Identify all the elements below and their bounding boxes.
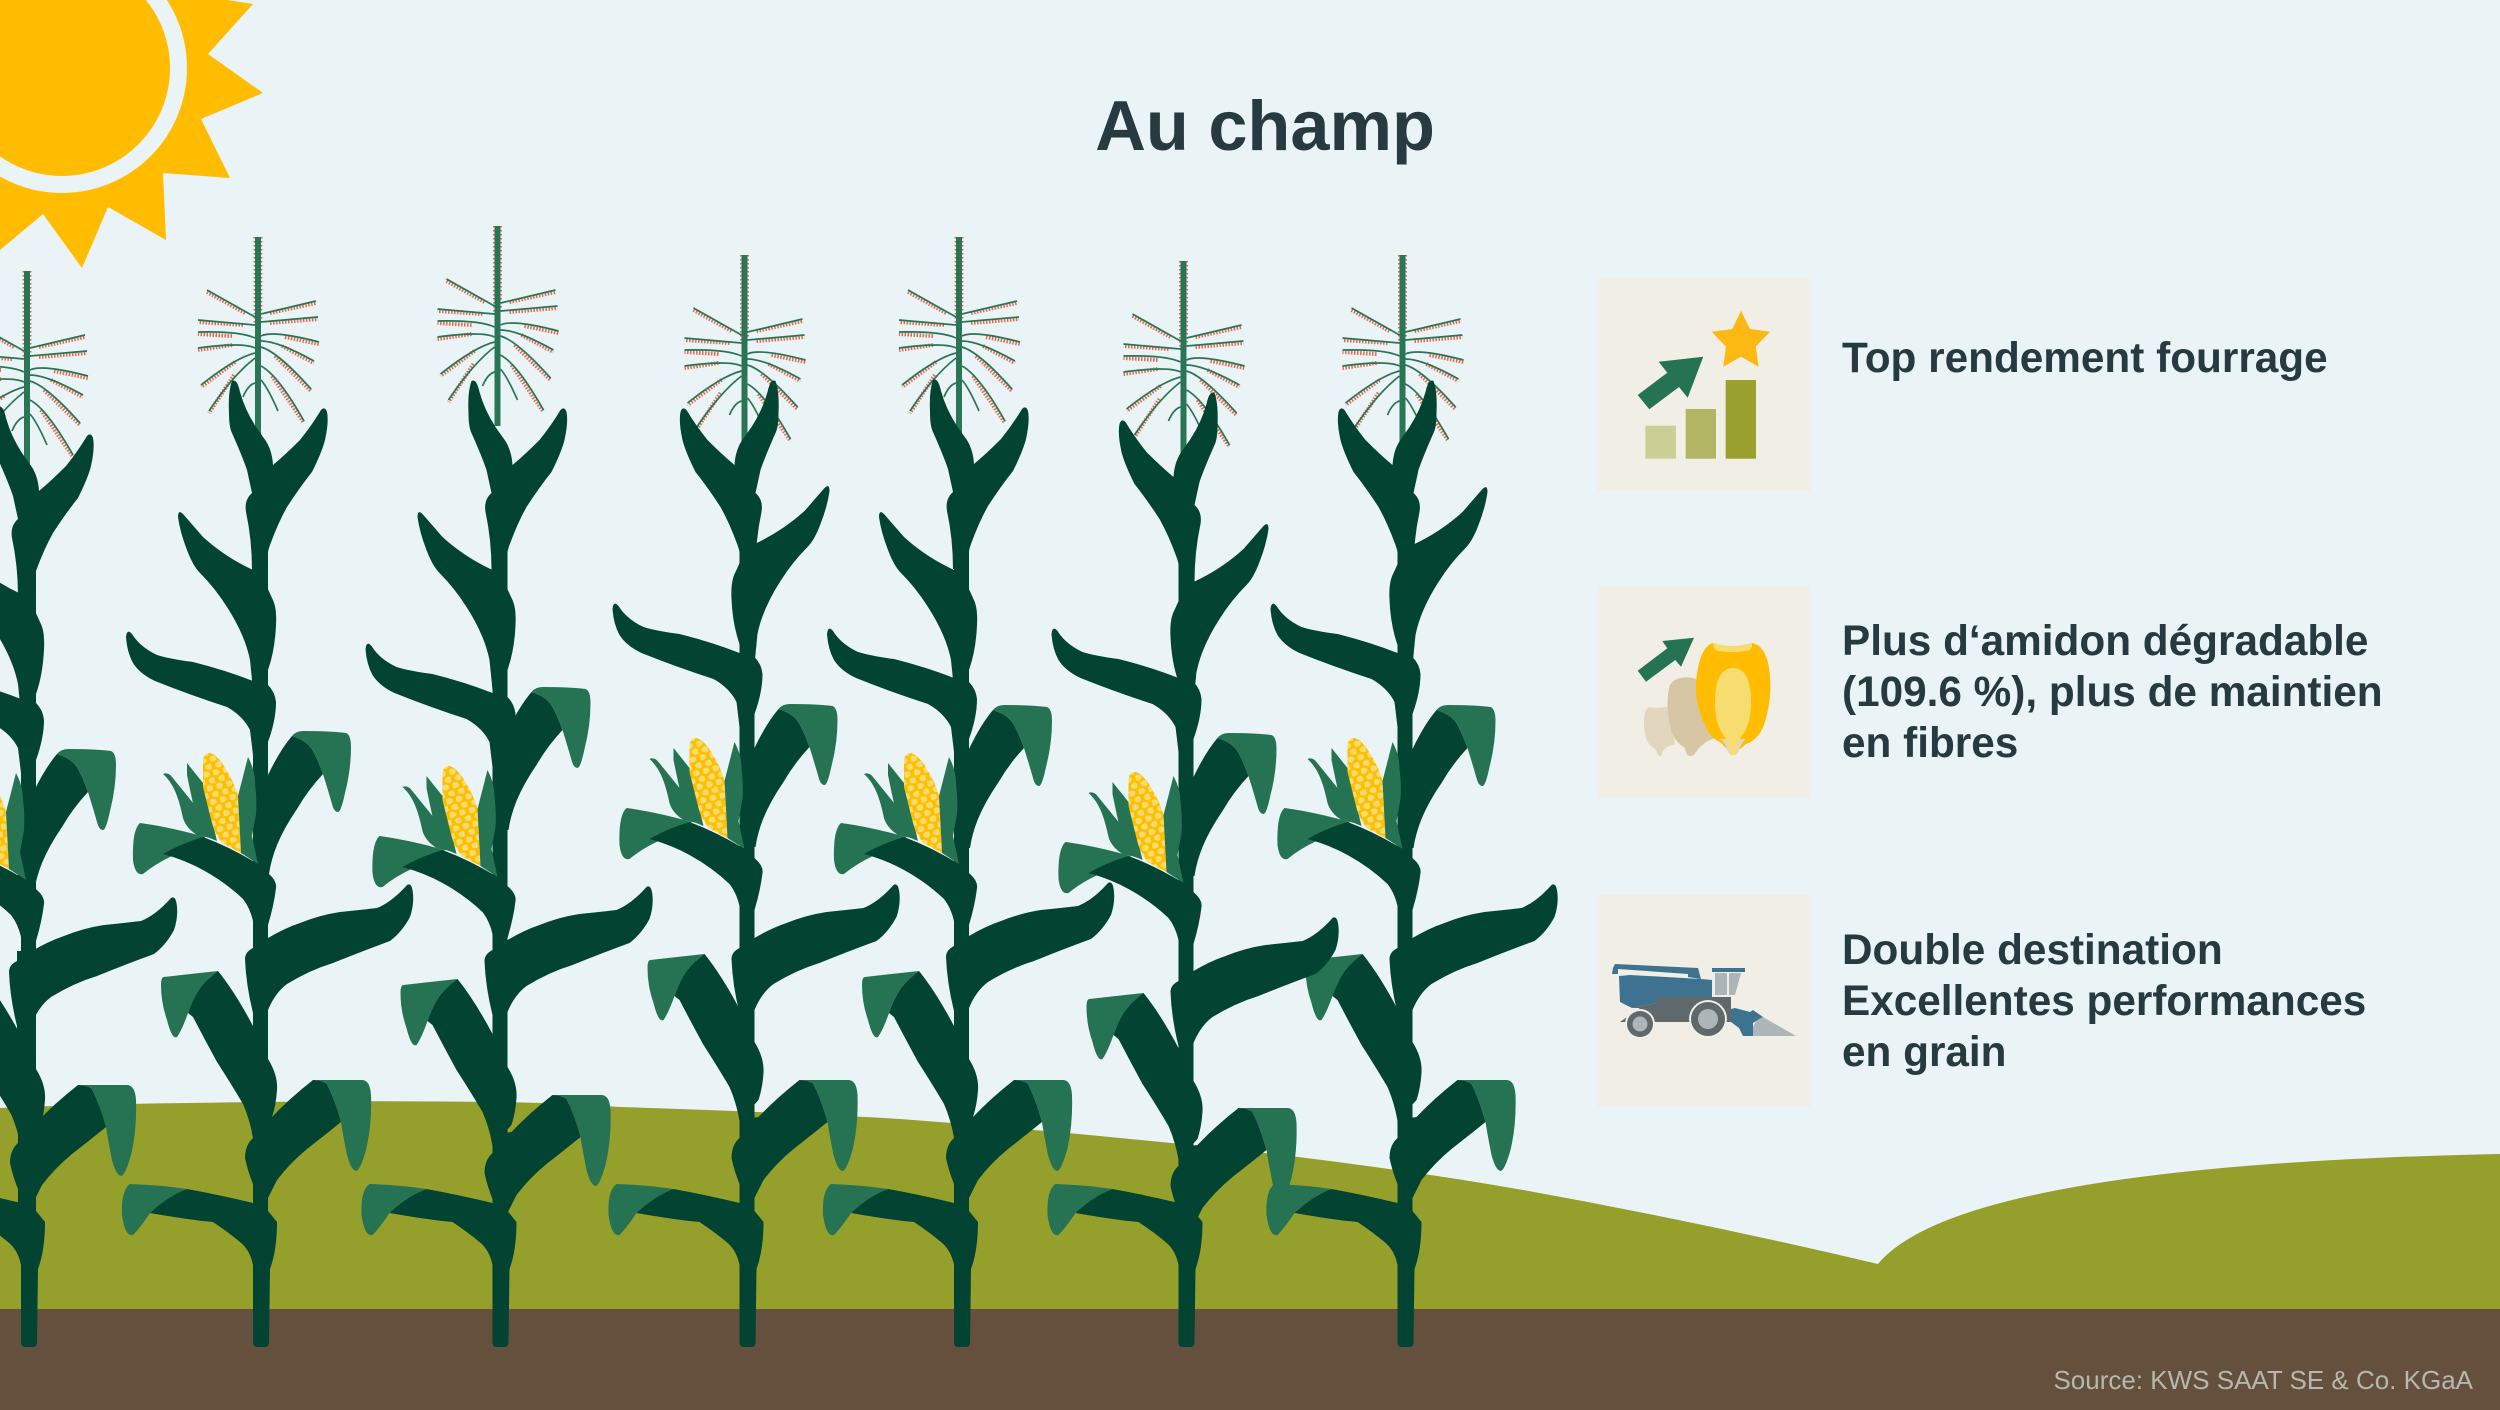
long leaf [1270, 604, 1420, 727]
label: Top rendement fourrage [1842, 334, 2328, 381]
plant 7 [1266, 255, 1558, 1347]
top leaves [468, 380, 567, 572]
tassel [198, 237, 319, 437]
label: Double destination [1842, 926, 2223, 973]
base leaf [122, 1184, 277, 1347]
upper leaf [879, 512, 977, 690]
lower right leaf [10, 1085, 136, 1203]
stem [492, 540, 508, 1310]
tassel [684, 255, 806, 455]
stem [1398, 540, 1412, 1310]
upper leaf [418, 512, 516, 690]
base leaf [608, 1184, 764, 1347]
label: en grain [1842, 1028, 2007, 1075]
lower left leaf [1306, 954, 1422, 1121]
label: en fibres [1842, 719, 2018, 766]
top leaves [1119, 392, 1218, 584]
stem [740, 540, 754, 1310]
lower left leaf [0, 981, 45, 1148]
base leaf [823, 1184, 978, 1347]
upper leaf [178, 512, 276, 690]
upper leaf [0, 536, 44, 714]
lower right leaf [484, 1095, 611, 1213]
corn ear and leaf [0, 769, 44, 953]
right long leaf [9, 897, 177, 1053]
top leaves [680, 380, 779, 572]
stem [954, 540, 969, 1310]
label: (109.6 %), plus de maintien [1842, 668, 2383, 715]
base leaf [361, 1184, 516, 1347]
folded leaf [18, 749, 116, 892]
lower right leaf [732, 1080, 858, 1198]
tassel [0, 271, 88, 471]
tassel [1124, 261, 1244, 461]
plant 6 [1047, 261, 1339, 1347]
tassel [1342, 255, 1464, 455]
lower right leaf [946, 1080, 1072, 1198]
icon: combine harvester [1612, 964, 1796, 1039]
plant 5 [823, 237, 1114, 1347]
stem [21, 540, 36, 1310]
lower left leaf [1086, 993, 1203, 1160]
lower left leaf [648, 954, 764, 1121]
lower left leaf [400, 979, 517, 1146]
plant 1 [0, 271, 177, 1347]
plant 2 [122, 237, 413, 1347]
right long leaf [1390, 884, 1558, 1040]
lower right leaf [1390, 1080, 1516, 1198]
stem [1178, 540, 1194, 1310]
folded leaf [492, 687, 590, 830]
panel: dual purpose [1598, 895, 2366, 1107]
source note: Source: KWS SAAT SE & Co. KGaA [2053, 1365, 2474, 1395]
icon tile [1598, 586, 1810, 798]
title: Au champ [1095, 86, 1435, 165]
right long leaf [732, 884, 900, 1040]
upper leaf [1389, 487, 1488, 665]
right long leaf [1170, 917, 1339, 1073]
top leaves [930, 379, 1029, 571]
right long leaf [484, 886, 653, 1042]
label [1842, 926, 2366, 1075]
plant 3 [361, 226, 653, 1347]
corn ear and leaf [133, 753, 276, 937]
long leaf [126, 632, 276, 755]
tassel [438, 226, 558, 426]
long leaf [0, 650, 44, 773]
stem [253, 540, 268, 1310]
top leaves [1338, 380, 1437, 572]
base leaf [1266, 1184, 1422, 1347]
base leaf [1047, 1184, 1202, 1347]
folded leaf [1398, 705, 1496, 848]
folded leaf [954, 705, 1052, 848]
soil [0, 1309, 2500, 1410]
icon: bar chart with star [1638, 311, 1770, 459]
corn ear and leaf [372, 766, 516, 950]
lower right leaf [1170, 1108, 1297, 1226]
long leaf [366, 644, 516, 767]
right long leaf [946, 882, 1114, 1038]
right long leaf [245, 884, 413, 1040]
plant 4 [608, 255, 900, 1347]
long leaf [1052, 629, 1202, 752]
folded leaf [740, 704, 838, 847]
folded leaf [1178, 733, 1276, 876]
corn ear and leaf [834, 753, 977, 937]
green hills [0, 1101, 2500, 1320]
icon: corn kernels with arrow [1638, 638, 1770, 756]
corn ear and leaf [1058, 772, 1202, 956]
corn ear and leaf [619, 738, 763, 922]
corn ear and leaf [1277, 738, 1421, 922]
icon tile [1598, 895, 1810, 1107]
lower right leaf [245, 1080, 371, 1198]
top leaves [0, 406, 94, 598]
icon tile [1598, 278, 1810, 491]
panel: starch [1598, 586, 2383, 798]
tassel [899, 237, 1020, 437]
lower left leaf [161, 971, 277, 1138]
label: Plus d‘amidon dégradable [1842, 617, 2368, 664]
panel: top yield [1598, 278, 2328, 491]
label [1842, 617, 2383, 766]
upper leaf [1170, 524, 1268, 702]
folded leaf [253, 731, 351, 874]
sun [0, 0, 263, 268]
label: Excellentes performances [1842, 977, 2366, 1024]
top leaves [229, 380, 328, 572]
upper leaf [731, 486, 830, 664]
long leaf [827, 629, 977, 752]
base leaf [0, 1184, 45, 1347]
lower left leaf [862, 971, 978, 1138]
long leaf [612, 604, 762, 727]
